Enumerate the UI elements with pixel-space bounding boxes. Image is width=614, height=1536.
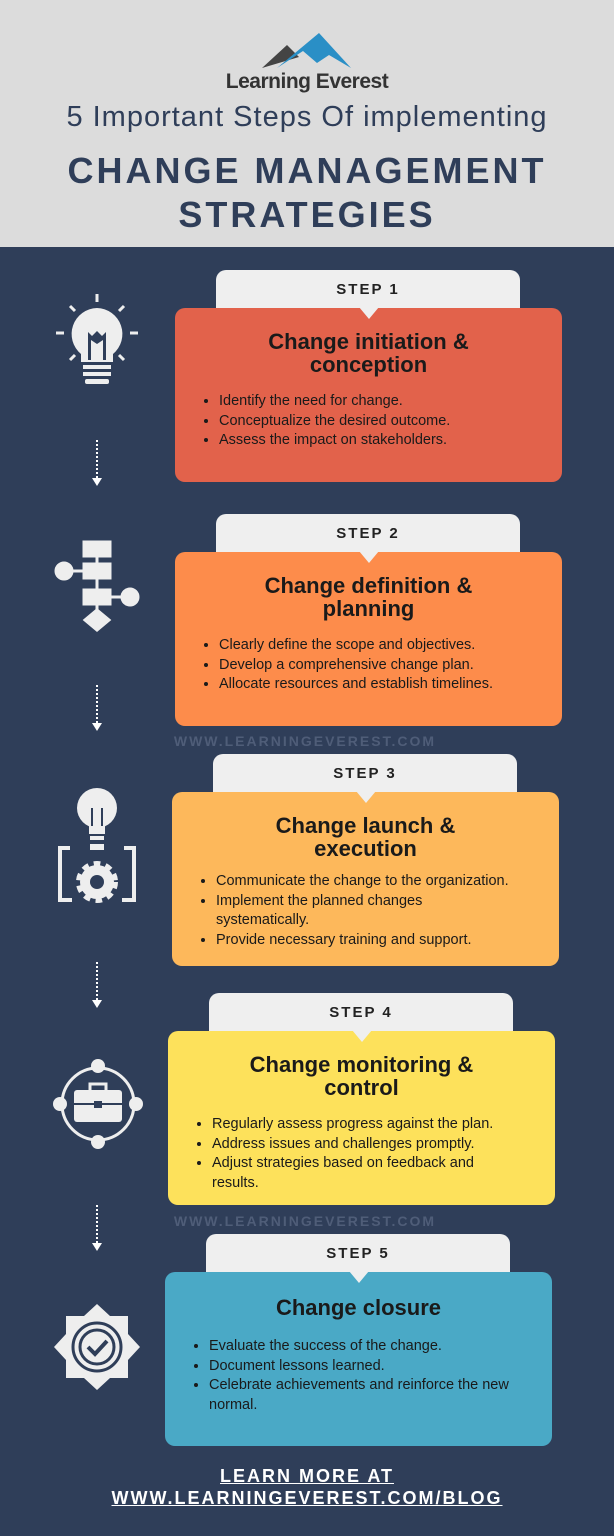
footer link: LEARN MORE AT bbox=[220, 1466, 394, 1486]
step 2 tab bbox=[216, 514, 520, 558]
step 5 tab: STEP 5 bbox=[326, 1245, 390, 1262]
step 3 card: execution bbox=[314, 836, 417, 861]
step 1 card: Identify the need for change. bbox=[219, 393, 403, 409]
step 2 card: Change definition & bbox=[265, 573, 472, 598]
step 5 tab bbox=[206, 1234, 510, 1278]
header panel bbox=[0, 0, 614, 247]
step 2 card: Develop a comprehensive change plan. bbox=[219, 656, 474, 672]
step 3 card: Provide necessary training and support. bbox=[216, 932, 472, 948]
icon: lightbulb bbox=[56, 294, 138, 384]
step 5 card: Document lessons learned. bbox=[209, 1358, 385, 1374]
step 5 card: Celebrate achievements and reinforce the new normal. bbox=[209, 1377, 509, 1412]
arrow 3 bbox=[96, 962, 98, 1000]
step 1 tab: STEP 1 bbox=[336, 281, 400, 298]
arrow 1 bbox=[96, 440, 98, 478]
step 4 card: Adjust strategies based on feedback and results. bbox=[212, 1155, 474, 1190]
step 5 card bbox=[165, 1272, 552, 1446]
step 1 card: Change initiation & bbox=[268, 329, 469, 354]
step 4 card: control bbox=[324, 1075, 399, 1100]
step 5 card: Evaluate the success of the change. bbox=[209, 1338, 442, 1354]
step 4 card bbox=[168, 1031, 555, 1205]
step 1 card: Assess the impact on stakeholders. bbox=[219, 432, 447, 448]
step 3 card: Implement the planned changes systematically. bbox=[216, 892, 422, 928]
footer link bbox=[112, 1466, 502, 1508]
step 3 tab: STEP 3 bbox=[333, 765, 397, 782]
step 2 card: Clearly define the scope and objectives. bbox=[219, 637, 475, 653]
step 3 card: Change launch & bbox=[276, 813, 455, 838]
title bbox=[68, 150, 546, 235]
arrow 4 bbox=[96, 1205, 98, 1243]
step 1 card: conception bbox=[310, 352, 427, 377]
step 1 card: Conceptualize the desired outcome. bbox=[219, 412, 450, 428]
step 5 card: Change closure bbox=[276, 1295, 441, 1320]
watermark: WWW.LEARNINGEVEREST.COM bbox=[174, 733, 436, 749]
step 3 tab bbox=[213, 754, 517, 798]
step 2 card: Allocate resources and establish timelines. bbox=[219, 676, 493, 692]
footer link: WWW.LEARNINGEVEREST.COM/BLOG bbox=[112, 1488, 502, 1508]
title: CHANGE MANAGEMENT bbox=[68, 150, 546, 191]
step 2 card: planning bbox=[323, 596, 414, 621]
logo bbox=[226, 33, 388, 93]
step 4 tab: STEP 4 bbox=[329, 1004, 393, 1021]
step 3 card bbox=[172, 792, 559, 966]
logo: Learning Everest bbox=[226, 70, 388, 93]
step 2 tab: STEP 2 bbox=[336, 525, 400, 542]
step 2 card bbox=[175, 552, 562, 726]
title: STRATEGIES bbox=[178, 194, 436, 235]
icon: bulb gear bbox=[58, 788, 136, 903]
step 4 card: Regularly assess progress against the plan. bbox=[212, 1116, 493, 1132]
arrow 2 bbox=[96, 685, 98, 723]
step 3 card: Communicate the change to the organization. bbox=[216, 873, 509, 889]
step 4 card: Address issues and challenges promptly. bbox=[212, 1136, 474, 1152]
icon: check badge bbox=[54, 1304, 140, 1390]
watermark: WWW.LEARNINGEVEREST.COM bbox=[174, 1213, 436, 1229]
icon: briefcase cycle bbox=[53, 1059, 143, 1149]
step 1 card bbox=[175, 308, 562, 482]
step 4 card: Change monitoring & bbox=[250, 1052, 473, 1077]
step 4 tab bbox=[209, 993, 513, 1037]
icon: flowchart bbox=[54, 540, 140, 632]
subtitle: 5 Important Steps Of implementing bbox=[66, 101, 548, 133]
step 1 tab bbox=[216, 270, 520, 314]
